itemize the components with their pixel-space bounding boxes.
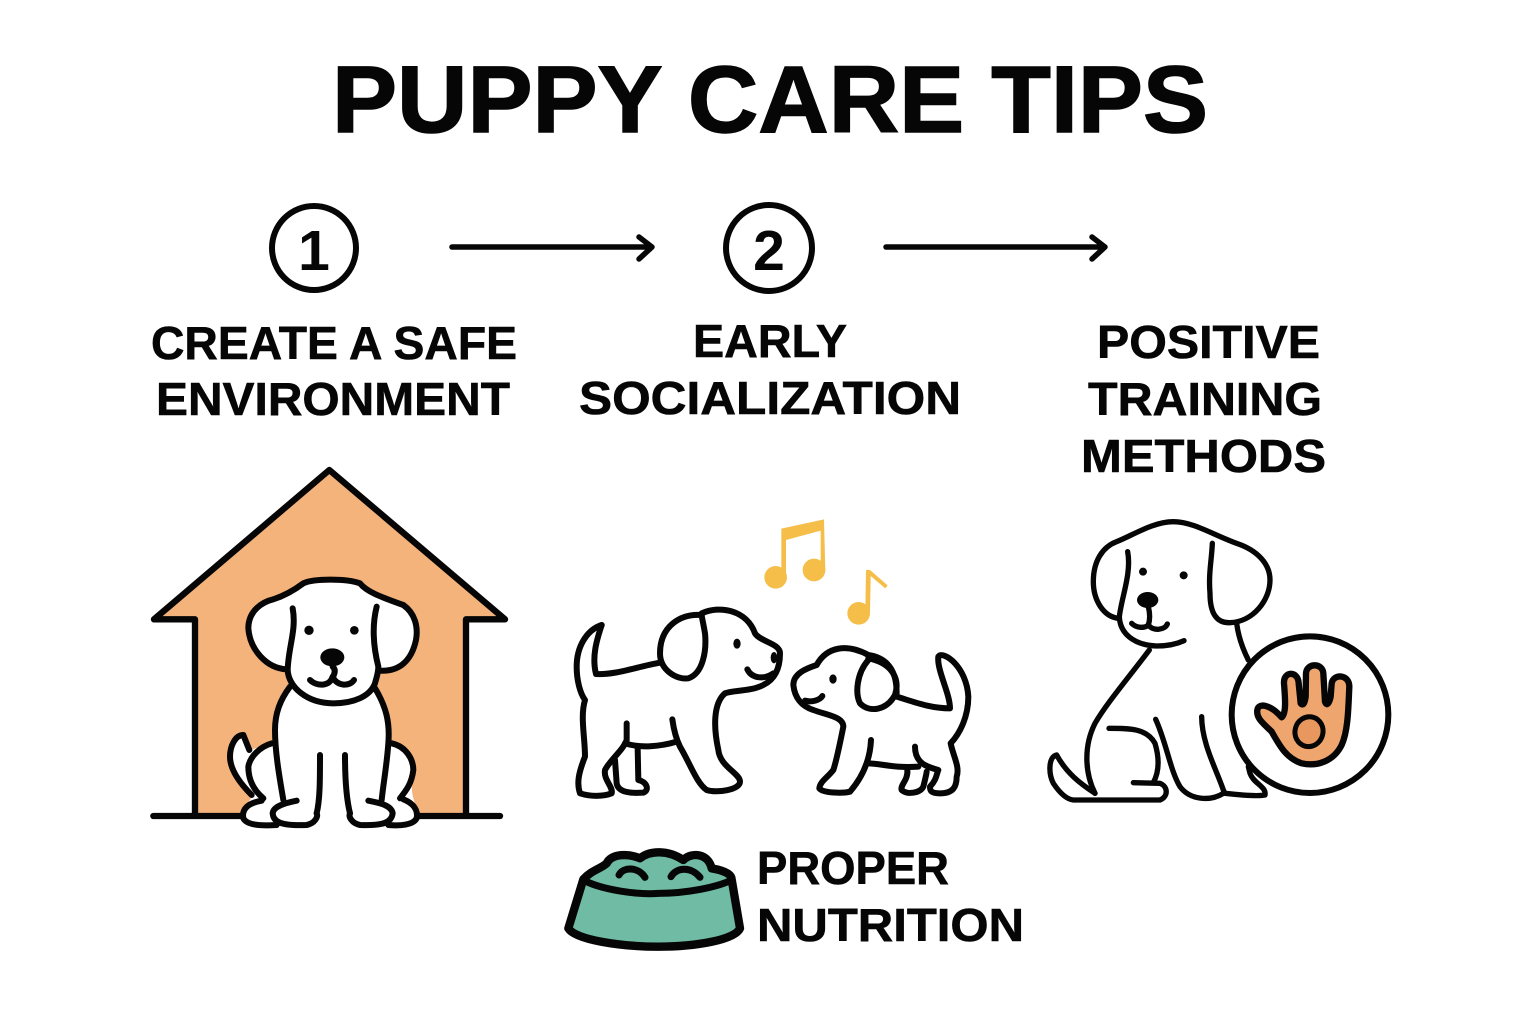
heading: create a safe environment: ENVIRONMENT <box>156 373 510 425</box>
hand signal badge <box>1232 636 1388 793</box>
heading: create a safe environment: CREATE A SAFE <box>151 317 517 369</box>
dog house <box>153 470 506 816</box>
step 1 number badge: 1 <box>298 219 330 283</box>
step 2 number badge: 2 <box>753 219 785 283</box>
icon: puppy in dog house <box>153 470 506 825</box>
music notes <box>764 519 888 625</box>
heading: proper nutrition <box>757 842 1024 951</box>
puppy <box>230 580 417 825</box>
step 1 number badge <box>272 206 356 290</box>
heading: proper nutrition: PROPER <box>757 842 949 894</box>
larger puppy <box>577 610 780 796</box>
heading: positive training methods: METHODS <box>1081 430 1326 482</box>
heading: positive training methods: TRAINING <box>1088 373 1322 425</box>
heading: early socialization: EARLY <box>693 315 847 367</box>
heading: create a safe environment <box>151 317 517 425</box>
heading: proper nutrition: NUTRITION <box>757 899 1024 951</box>
step 2 number badge <box>726 205 812 291</box>
heading: early socialization <box>579 315 961 424</box>
heading: positive training methods: POSITIVE <box>1097 316 1320 368</box>
arrow: step 1 to step 2 <box>452 237 652 259</box>
icon: two puppies greeting with music notes <box>577 519 968 796</box>
icon: sitting puppy with hand signal <box>1050 522 1388 800</box>
smaller puppy <box>793 648 968 793</box>
heading: positive training methods <box>1081 316 1326 482</box>
title: PUPPY CARE TIPS <box>332 47 1208 153</box>
arrow: step 2 to step 3 <box>886 237 1105 259</box>
icon: food bowl <box>568 852 740 947</box>
heading: early socialization: SOCIALIZATION <box>579 372 961 424</box>
sitting puppy <box>1050 522 1270 800</box>
